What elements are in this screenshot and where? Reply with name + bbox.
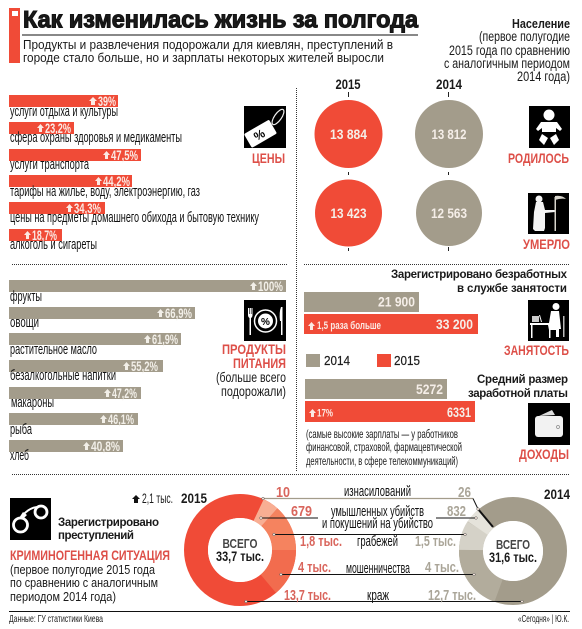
crime row: murder: 679: [291, 504, 312, 520]
subtitle: Продукты и развлечения подорожали для киевлян, преступлений в: [23, 37, 393, 52]
heading: salary: заработной платы: [468, 388, 568, 400]
label: food products: подорожали): [221, 384, 286, 399]
text: crime situation: [10, 547, 170, 604]
crime row: theft: краж: [367, 588, 389, 604]
heading: salary: [468, 374, 568, 400]
bar chart: unemployed: 33 200: [436, 316, 473, 332]
price bar: household: 34,3%: [74, 200, 101, 216]
crime row: murder: и покушений на убийство: [322, 516, 433, 532]
food bar: vegetables: овощи: [10, 314, 39, 331]
header accent bar: [9, 8, 20, 63]
crime row: rape: изнасилований: [344, 484, 411, 500]
heading: salary: Средний размер: [477, 374, 568, 386]
note: top salaries: (самые высокие зарплаты — у работников: [306, 427, 458, 441]
total 2015: [216, 536, 264, 564]
donut chart 2014: [471, 509, 555, 593]
food bar: fruit: [9, 278, 286, 305]
bar chart: salary: [305, 379, 475, 422]
crime increase: [132, 491, 173, 506]
crime row: murder: 832: [447, 504, 466, 520]
circle: deaths 2014: [416, 180, 482, 246]
total 2014: [489, 537, 537, 565]
label: income: ДОХОДЫ: [519, 446, 569, 462]
price bar: alcohol: [9, 227, 97, 253]
subtitle: городе стало больше, но и зарплаты некоторых жителей выросли: [23, 50, 384, 65]
total 2014: 31,6 тыс.: [489, 550, 537, 565]
panel: prices: [9, 93, 259, 253]
price bar: transport: услуги транспорта: [10, 156, 89, 173]
price bar: utilities: тарифы на жилье, воду, электроэнергию, газ: [10, 183, 200, 200]
year 2014: 2014: [544, 487, 570, 502]
text: crime situation: КРИМИНОГЕННАЯ СИТУАЦИЯ: [10, 547, 170, 563]
legend: 2014: [324, 354, 350, 368]
price bar: health: 23,2%: [45, 120, 71, 136]
label: food products: ПИТАНИЯ: [233, 355, 286, 371]
crime row: fraud: 4 тыс.: [298, 560, 331, 576]
food bar: soft drinks: безалкогольные напитки: [10, 367, 116, 384]
price bar: culture: услуги отдыха и культуры: [10, 103, 118, 120]
food bar: bread: хлеб: [10, 447, 29, 464]
subtitle: [23, 37, 393, 65]
crime row: rape: [276, 484, 471, 501]
crime row: robbery: 1,8 тыс.: [300, 534, 342, 550]
legend: [306, 354, 420, 368]
crime increase: 2,1 тыс.: [142, 491, 173, 506]
circle: deaths 2015: 13 423: [330, 205, 367, 221]
text: crime situation: по сравнению с аналогичным: [10, 575, 158, 590]
heading: unemployed: в службе занятости: [457, 283, 567, 295]
circle: births 2015: [314, 100, 382, 168]
crime row: robbery: 1,5 тыс.: [415, 534, 456, 550]
heading: unemployed: [391, 269, 568, 295]
circle: births 2014: [415, 100, 483, 168]
price bar: utilities: 44,2%: [103, 173, 130, 189]
food bar: soft drinks: 55,2%: [131, 358, 158, 374]
food bar: oil: [9, 331, 181, 358]
icon: plate: %: [261, 317, 270, 328]
food bar: fruit: фрукты: [10, 288, 42, 305]
food bar: fish: рыба: [10, 421, 32, 438]
icon: price tag: %: [251, 126, 268, 144]
icon: plate: [244, 300, 286, 341]
icon: wallet: [528, 403, 570, 445]
food bar: pasta: макароны: [11, 394, 54, 411]
food bar: oil: растительное масло: [10, 341, 97, 358]
price bar: transport: 47,5%: [111, 147, 138, 163]
price bar: alcohol: 18,7%: [32, 227, 57, 243]
price bar: transport: [9, 147, 141, 173]
population heading: [444, 17, 570, 84]
bar chart: salary: 17%: [317, 408, 333, 420]
crime row: fraud: мошенничества: [346, 561, 411, 577]
crime row: rape: 10: [276, 485, 290, 501]
food bar: fish: 46,1%: [108, 411, 134, 427]
crime row: robbery: [300, 534, 456, 550]
circle: deaths 2015: [315, 180, 382, 246]
label: food products: [216, 341, 286, 399]
note: top salaries: финансовой, страховой, фармацевтической: [306, 440, 462, 454]
bar chart: unemployed: [304, 292, 478, 334]
price bar: health: сфера охраны здоровья и медикаменты: [10, 129, 182, 146]
text: crime situation: периодом 2014 года): [10, 589, 116, 604]
icon: price tag: [244, 106, 286, 148]
bar chart: unemployed: 1,5 раза больше: [317, 320, 381, 332]
panel: food products: [9, 278, 286, 464]
bar chart: unemployed: 21 900: [378, 294, 415, 310]
food bar: bread: [9, 438, 123, 464]
year labels: 2015: [336, 77, 361, 92]
food bar: soft drinks: [9, 358, 163, 384]
icon: baby: [529, 106, 570, 148]
heading: crime: [58, 517, 159, 542]
price bar: household: цены на предметы домашнего обихода и бытовую технику: [10, 209, 259, 226]
price bar: culture: [9, 93, 118, 120]
icon: desk worker: [528, 300, 569, 341]
crime row: fraud: 4 тыс.: [425, 560, 459, 576]
icon: reaper: [528, 193, 569, 234]
price bar: utilities: [9, 173, 200, 200]
crime row: theft: [284, 588, 476, 604]
source: Данные: ГУ статистики Киева: [9, 613, 103, 625]
connector lines: [245, 497, 523, 603]
circle: births 2015: 13 884: [330, 126, 367, 142]
crime row: robbery: грабежей: [357, 534, 398, 550]
bar chart: salary: 6331: [447, 404, 471, 420]
heading: unemployed: Зарегистрировано безработных: [391, 269, 568, 281]
label: prices: ЦЕНЫ: [252, 150, 285, 166]
crime row: rape: 26: [458, 485, 471, 501]
food bar: vegetables: [9, 305, 195, 331]
legend: 2015: [394, 354, 420, 368]
text: crime situation: (первое полугодие 2015 года: [10, 562, 156, 577]
food bar: oil: 61,9%: [152, 331, 178, 347]
food bar: vegetables: 66,9%: [165, 305, 192, 321]
heading: crime: преступлений: [58, 530, 134, 542]
total 2015: 33,7 тыс.: [216, 549, 264, 564]
circle: deaths 2014: 12 563: [431, 205, 467, 221]
icon: handcuffs: [10, 498, 51, 540]
year labels: [336, 77, 462, 92]
price bar: household: [9, 200, 259, 226]
crime row: theft: 13,7 тыс.: [284, 588, 331, 604]
year labels: 2014: [436, 77, 462, 92]
title: Как изменилась жизнь за полгода: [23, 6, 419, 34]
crime row: murder: [291, 504, 466, 532]
crime row: theft: 12,7 тыс.: [428, 588, 476, 604]
bar chart: salary: 5272: [416, 381, 443, 397]
price bar: alcohol: алкоголь и сигареты: [10, 236, 97, 253]
total 2015: ВСЕГО: [222, 536, 258, 551]
price bar: health: [9, 120, 182, 146]
food bar: fruit: 100%: [258, 278, 283, 294]
population heading: 2014 года): [517, 69, 570, 84]
price bar: culture: 39%: [98, 93, 116, 109]
crime row: fraud: [298, 560, 459, 577]
note: top salaries: деятельности, в сфере телекоммуникаций): [306, 454, 458, 468]
note: top salaries: [306, 427, 462, 468]
food bar: pasta: [9, 385, 141, 411]
circle: births 2014: 13 812: [432, 126, 467, 142]
crime row: murder: умышленных убийств: [331, 504, 424, 520]
label: food products: ПРОДУКТЫ: [222, 341, 286, 357]
heading: crime: Зарегистрировано: [58, 517, 159, 529]
total 2014: ВСЕГО: [496, 537, 530, 552]
population heading: Население: [512, 17, 570, 31]
label: food products: (больше всего: [216, 370, 286, 385]
donut chart 2015: [196, 506, 284, 594]
food bar: pasta: 47,2%: [112, 385, 137, 401]
label: died: УМЕРЛО: [523, 236, 570, 252]
food bar: fish: [9, 411, 138, 438]
year 2015: 2015: [181, 491, 207, 506]
food bar: bread: 40,8%: [91, 438, 120, 454]
